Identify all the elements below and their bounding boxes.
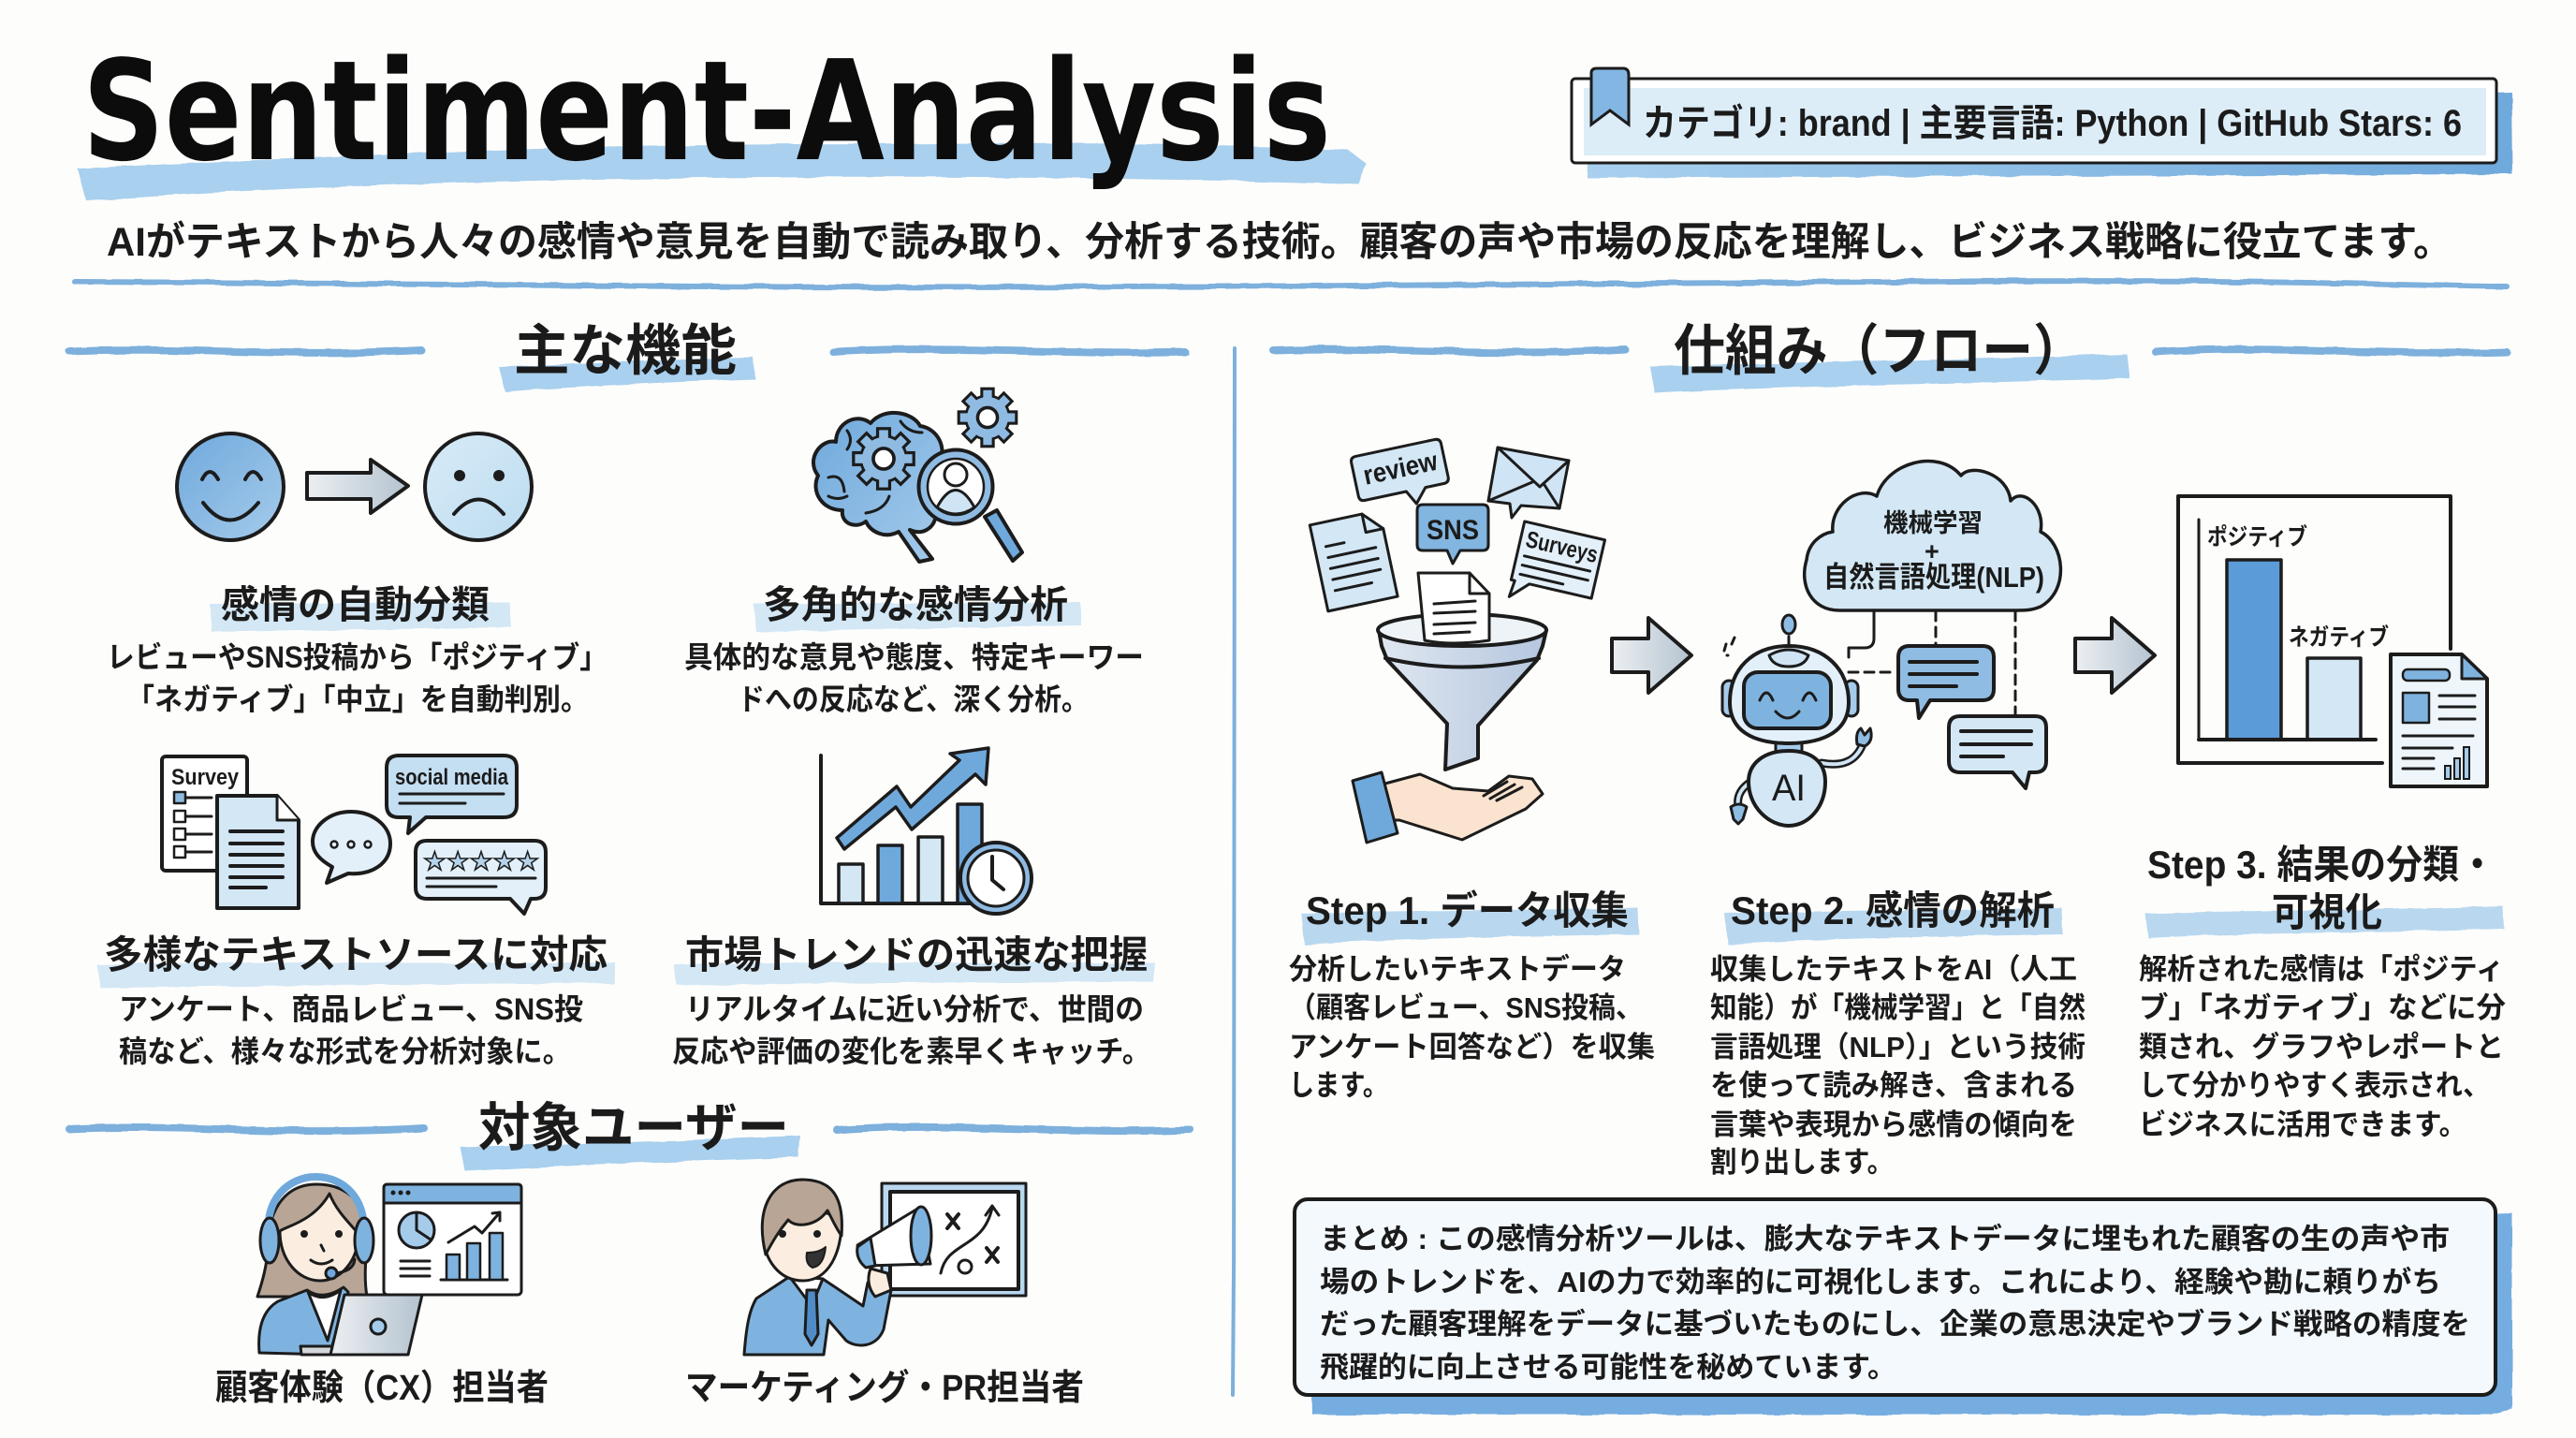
step title: 可視化 xyxy=(2272,890,2382,934)
step description: ブ」「ネガティブ」などに分 xyxy=(2139,991,2506,1024)
feature description xyxy=(119,992,583,1068)
feature description: 具体的な意見や態度、特定キーワー xyxy=(684,640,1144,674)
step description: 類され、グラフやレポートと xyxy=(2139,1031,2504,1064)
step description: （顧客レビュー、SNS投稿、 xyxy=(1289,991,1643,1024)
callout: summary: 場のトレンドを、AIの力で効率的に可視化します。これにより、経験や勘に頼りがち xyxy=(1320,1266,2441,1299)
feature title: 多様なテキストソースに対応 xyxy=(104,932,607,976)
step description: 知能）が「機械学習」と「自然 xyxy=(1710,991,2086,1024)
icon: SNS bubble xyxy=(1417,505,1488,564)
icon: data collection funnel xyxy=(1310,438,1605,843)
step description: 割り出します。 xyxy=(1710,1146,1894,1179)
summary sentence: AIがテキストから人々の感情や意見を自動で読み取り、分析する技術。顧客の声や市場の反応を理解し、ビジネス戦略に役立てます。 xyxy=(107,220,2452,265)
icon: dark speech bubble xyxy=(1898,646,1994,718)
icon: SNS bubble: SNS xyxy=(1427,515,1479,546)
icon: survey, document and speech bubbles: Survey xyxy=(171,765,240,790)
metadata badge xyxy=(1572,68,2512,178)
arrow: step 2 to step 3 xyxy=(2075,618,2155,693)
callout: summary: 飛躍的に向上させる可能性を秘めています。 xyxy=(1320,1351,1896,1384)
feature description: 稿など、様々な形式を分析対象に。 xyxy=(119,1034,571,1068)
feature description xyxy=(684,640,1144,716)
heading: target users: 対象ユーザー xyxy=(478,1098,789,1157)
icon: robot xyxy=(1722,615,1871,826)
step title: Step 3. 結果の分類・ xyxy=(2147,843,2496,887)
step description: アンケート回答など）を収集 xyxy=(1289,1031,1655,1064)
step title: Step 2. 感情の解析 xyxy=(1731,888,2055,932)
feature description: レビューやSNS投稿から「ポジティブ」 xyxy=(107,640,607,674)
step description: します。 xyxy=(1289,1069,1388,1102)
feature description xyxy=(672,992,1150,1068)
icon: survey, document and speech bubbles: ★★★★★ xyxy=(423,847,539,876)
icon: AI robot analysis xyxy=(1722,462,2060,826)
metadata badge: カテゴリ: brand | 主要言語: Python | GitHub Stars: 6 xyxy=(1643,103,2462,144)
callout: summary: まとめ : この感情分析ツールは、膨大なテキストデータに埋もれた顧客の生の声や市 xyxy=(1320,1223,2450,1255)
vertical divider xyxy=(1233,348,1235,1395)
callout: summary xyxy=(1295,1199,2512,1415)
callout: summary: だった顧客理解をデータに基づいたものにし、企業の意思決定やブランド戦略の精度を xyxy=(1320,1308,2470,1341)
feature title: 感情の自動分類 xyxy=(221,583,490,626)
user label: 顧客体験（CX）担当者 xyxy=(215,1369,549,1408)
panel: target users xyxy=(69,1098,1191,1408)
chart label: negative: ネガティブ xyxy=(2289,624,2389,651)
step title: Step 1. データ収集 xyxy=(1306,888,1629,932)
icon: survey, document and speech bubbles: social media xyxy=(395,765,509,790)
icon: surveys bubble xyxy=(1507,521,1605,615)
connectors xyxy=(1849,611,1874,657)
icon: open hand xyxy=(1353,772,1543,843)
icon: funnel xyxy=(1378,573,1546,770)
step 3 xyxy=(2139,843,2506,1141)
step description: 分析したいテキストデータ xyxy=(1289,953,1626,986)
icon: cloud with text: 自然言語処理(NLP) xyxy=(1823,561,2044,594)
icon: result chart with report xyxy=(2178,496,2487,786)
step description xyxy=(1289,953,1655,1102)
step description: ビジネスに活用できます。 xyxy=(2139,1108,2466,1141)
icon: woman with headset and dashboard xyxy=(257,1177,521,1355)
icon: robot: AI xyxy=(1772,768,1806,809)
step description: を使って読み解き、含まれる xyxy=(1710,1069,2077,1102)
step description: 言葉や表現から感情の傾向を xyxy=(1710,1108,2077,1141)
step title xyxy=(2145,843,2504,938)
icon: cloud with text xyxy=(1805,462,2060,610)
icon: light speech bubble xyxy=(1949,716,2046,788)
header xyxy=(75,31,2512,287)
user: CX manager xyxy=(215,1177,549,1408)
feature: automatic classification xyxy=(107,433,607,716)
feature description: 反応や評価の変化を素早くキャッチ。 xyxy=(672,1034,1150,1068)
icon: survey, document and speech bubbles xyxy=(162,756,546,914)
feature title: 市場トレンドの迅速な把握 xyxy=(685,933,1148,976)
user label: マーケティング・PR担当者 xyxy=(685,1369,1084,1408)
icon: envelope xyxy=(1488,448,1569,518)
feature description: 「ネガティブ」「中立」を自動判別。 xyxy=(126,682,589,716)
icon: man with megaphone and strategy board xyxy=(744,1180,1026,1355)
step description xyxy=(2139,953,2506,1141)
icon: report document xyxy=(2391,654,2487,786)
feature: market trends xyxy=(672,748,1155,1068)
heading: how it works: 仕組み（フロー） xyxy=(1674,320,2085,382)
step description: 解析された感情は「ポジティ xyxy=(2139,953,2504,986)
feature description xyxy=(107,640,607,716)
feature description: アンケート、商品レビュー、SNS投 xyxy=(119,992,583,1026)
icon: bookmark xyxy=(1591,68,1629,125)
user: marketing and PR xyxy=(685,1180,1084,1408)
step description xyxy=(1710,953,2086,1179)
heading: target users xyxy=(69,1098,1191,1171)
step description: して分かりやすく表示され、 xyxy=(2139,1069,2490,1102)
heading: how it works xyxy=(1273,320,2507,393)
feature description: リアルタイムに近い分析で、世間の xyxy=(685,992,1144,1026)
step 2 xyxy=(1710,888,2086,1179)
heading: main features: 主な機能 xyxy=(514,320,737,382)
icon: review bubble xyxy=(1350,438,1452,515)
icon: document xyxy=(1310,510,1398,611)
feature: multi-angle analysis xyxy=(684,389,1144,716)
icon: review bubble: review xyxy=(1361,447,1441,492)
title with brush stroke: Sentiment-Analysis xyxy=(82,31,1331,192)
feature title: 多角的な感情分析 xyxy=(763,583,1068,626)
chart label: positive: ポジティブ xyxy=(2207,523,2307,550)
panel: main features xyxy=(69,320,1185,1068)
icon: surveys bubble: Surveys xyxy=(1523,526,1601,568)
icon: rising bar chart with clock xyxy=(821,748,1032,914)
heading: main features xyxy=(69,320,1185,392)
step 1 xyxy=(1289,888,1655,1102)
feature: diverse text sources xyxy=(96,756,615,1068)
arrow: step 1 to step 2 xyxy=(1612,618,1691,693)
icon: cloud with text: 機械学習 xyxy=(1883,509,1983,537)
step description: 言語処理（NLP）」という技術 xyxy=(1710,1031,2086,1064)
icon: cloud with text: + xyxy=(1925,537,1939,565)
feature description: ドへの反応など、深く分析。 xyxy=(738,682,1089,716)
step description: 収集したテキストをAI（人工 xyxy=(1710,953,2077,986)
panel: how it works flow xyxy=(1273,320,2512,1415)
icon: smile to sad xyxy=(177,433,532,540)
icon: brain with gears and magnifier xyxy=(813,389,1022,562)
